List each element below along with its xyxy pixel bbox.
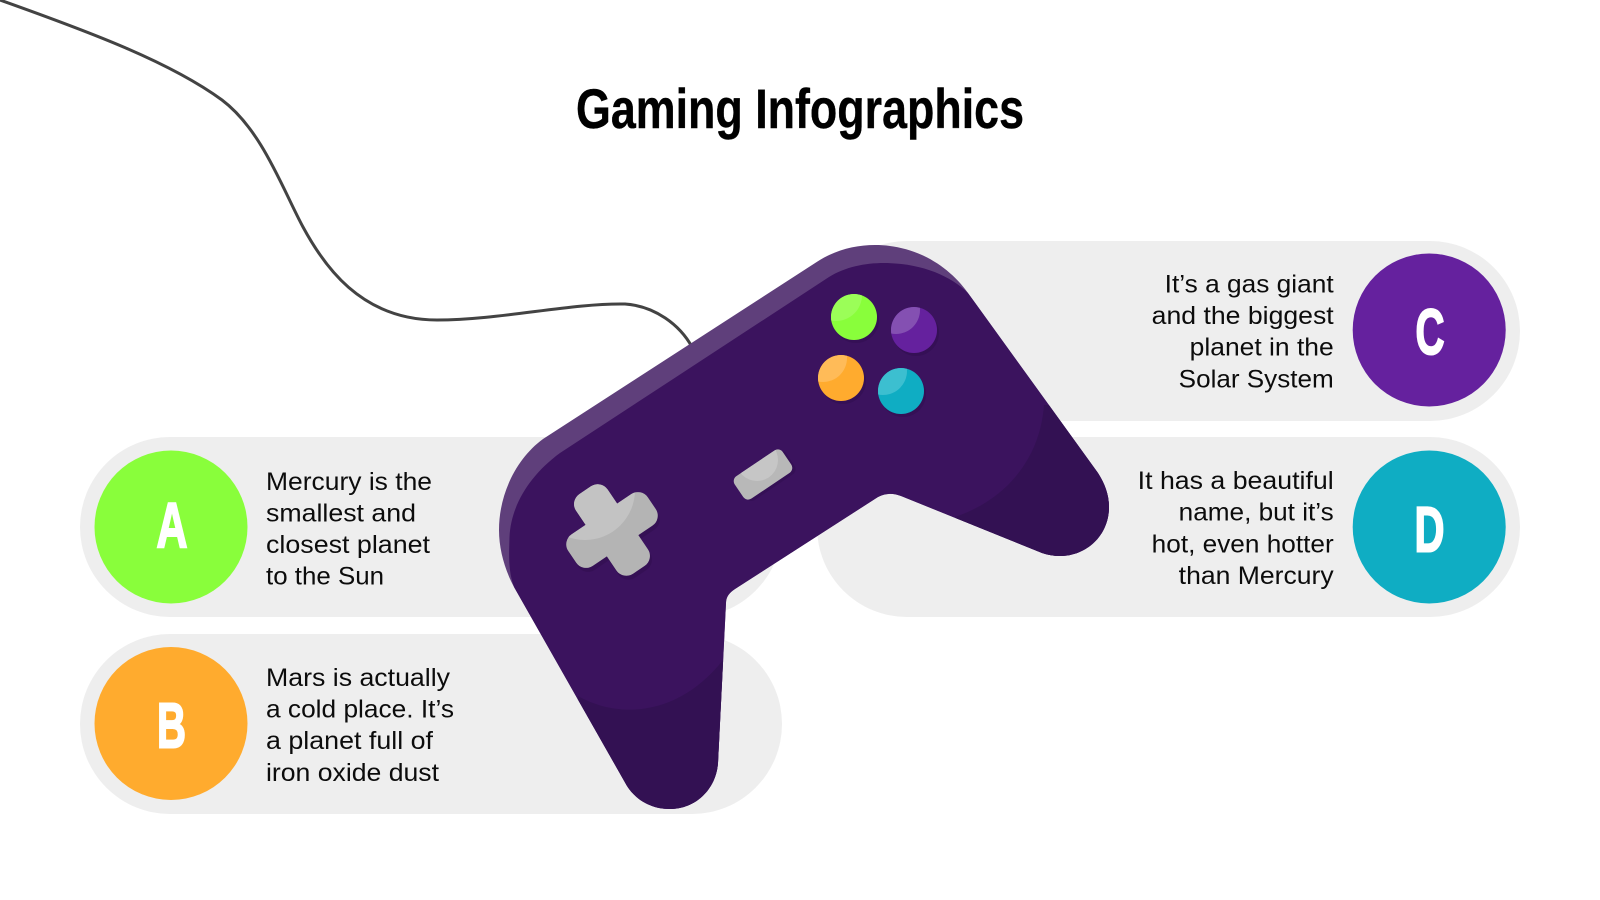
text block D: name, but it’s [1179, 499, 1334, 527]
text block B: Mars is actually [266, 664, 451, 692]
text block A: closest planet [266, 531, 430, 559]
d-pad [566, 484, 660, 580]
green button [831, 294, 877, 340]
controller body [499, 245, 1109, 809]
text block B: a planet full of [266, 727, 433, 755]
badge B [94, 647, 248, 800]
text block D: It has a beautiful [1138, 467, 1334, 495]
text block C [1152, 271, 1334, 393]
minus button [734, 449, 792, 500]
text block B: iron oxide dust [266, 759, 439, 787]
text block A: smallest and [266, 500, 416, 528]
icon: game controller [499, 245, 1109, 809]
teal button [878, 368, 924, 416]
text block B [266, 664, 454, 787]
badge A [94, 450, 248, 604]
panel: B pill background [80, 634, 782, 814]
text block C: Solar System [1179, 365, 1334, 393]
text block C: and the biggest [1152, 302, 1334, 330]
orange button [818, 355, 864, 401]
controller cable [0, 0, 692, 347]
text block A: to the Sun [266, 563, 384, 591]
text block C: It’s a gas giant [1165, 271, 1334, 299]
text block D [1138, 467, 1334, 590]
badge C: C [1416, 296, 1444, 368]
badge D: D [1414, 494, 1444, 566]
badge A: A [156, 490, 188, 562]
panel: D pill background [817, 437, 1520, 617]
text block D: than Mercury [1179, 562, 1334, 590]
badge C [1353, 254, 1506, 406]
purple button [891, 307, 937, 353]
text block D: hot, even hotter [1152, 530, 1334, 558]
title: Gaming Infographics [576, 77, 1024, 140]
panel: A pill background [80, 437, 782, 617]
text block A: Mercury is the [266, 468, 432, 496]
badge B: B [157, 690, 186, 762]
text block B: a cold place. It’s [266, 696, 454, 724]
text block A [266, 468, 432, 591]
badge D [1353, 450, 1506, 604]
panel: C pill background [817, 241, 1520, 421]
text block C: planet in the [1190, 334, 1334, 362]
